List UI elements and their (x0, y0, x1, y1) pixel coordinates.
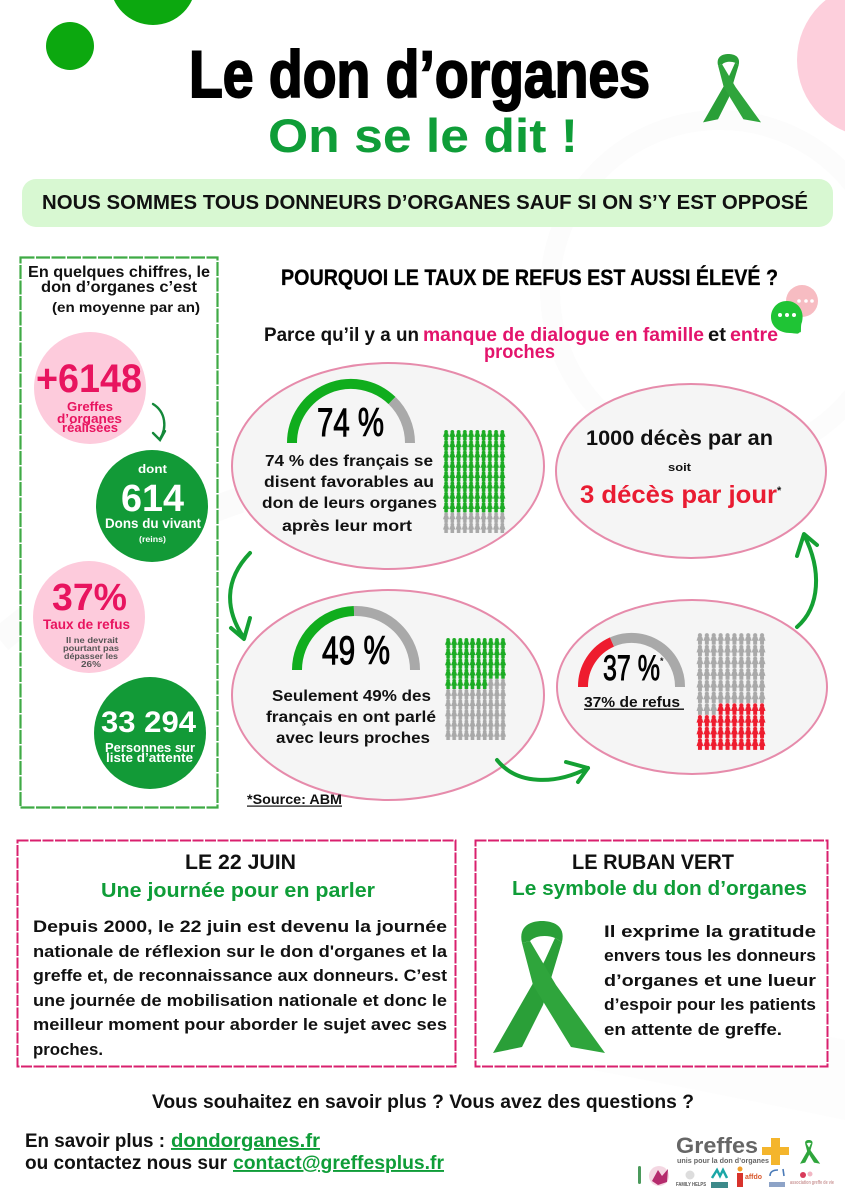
arrow: talked to refusal (497, 760, 588, 782)
logo: Greffes Plus: Greffes (676, 1133, 758, 1158)
gauge: 74% (292, 384, 410, 443)
banner: NOUS SOMMES TOUS DONNEURS D’ORGANES SAUF SI ON S’Y EST OPPOSÉ (42, 191, 808, 214)
panel: deaths per year: * (777, 485, 782, 497)
text block: une journée de mobilisation nationale et donc le (33, 992, 447, 1010)
text: reason: proches (484, 342, 555, 363)
stat: refusal rate: dépasser les (64, 651, 118, 661)
text block: nationale de réflexion sur le don d'organes et la (33, 943, 448, 961)
pictogram: 49 of 100 (445, 638, 506, 740)
text: 74% description: 74 % des français se (265, 453, 433, 470)
decorative circle: pink (797, 0, 845, 137)
panel: green ribbon (476, 840, 828, 1066)
text block: Depuis 2000, le 22 juin est devenu la journée (33, 918, 447, 936)
footer contact: ou contactez nous sur (25, 1153, 228, 1174)
panel: deaths per year: soit (668, 462, 691, 474)
stat: transplants: +6148 (36, 357, 142, 401)
logo: Greffes Plus (676, 1133, 820, 1165)
footer contact (25, 1131, 445, 1174)
stat: refusal rate: pourtant pas (63, 643, 119, 653)
stat: living donors: Dons du vivant (105, 515, 201, 531)
panel: key figures (20, 258, 218, 808)
stat: refusal rate: Taux de refus (43, 617, 130, 632)
gauge: 49% (297, 611, 415, 670)
partner logos: affdo (745, 1174, 762, 1181)
text block: proches. (33, 1041, 103, 1059)
text: refusal label: 37% de refus (584, 694, 680, 711)
stat: refusal rate: 26% (81, 659, 102, 669)
icon: logo ribbon (800, 1140, 820, 1164)
footer contact: En savoir plus : (25, 1131, 165, 1152)
text block (604, 923, 817, 1039)
text block (33, 918, 448, 1059)
pictogram: 37 of 100 (696, 633, 766, 750)
decorative circle: small green (46, 22, 94, 70)
panel heading (28, 264, 210, 315)
text block: Il exprime la gratitude (604, 923, 816, 941)
panel: 49% talked (232, 590, 544, 800)
heading: LE RUBAN VERT (572, 851, 734, 874)
stat: transplants (34, 332, 146, 444)
partner logos (638, 1166, 834, 1188)
stat: waiting list: Personnes sur (105, 741, 195, 755)
stat: waiting list: 33 294 (101, 706, 196, 739)
text: 49% description: Seulement 49% des (272, 688, 431, 705)
pictogram: 74 of 100 (443, 430, 506, 533)
subheading: Une journée pour en parler (101, 880, 375, 902)
arrow: transplants to living donors (153, 404, 165, 440)
panel: deaths per year: 3 décès par jour (580, 481, 777, 509)
gauge value: 37 % (603, 649, 660, 688)
panel heading: don d’organes c’est (41, 279, 198, 296)
panel: deaths per year (556, 384, 826, 558)
banner (22, 179, 833, 227)
icon: chat bubbles (771, 285, 818, 334)
panel heading: (en moyenne par an) (52, 299, 200, 315)
text: reason: et (708, 325, 727, 346)
footer contact: dondorganes.fr (171, 1131, 321, 1152)
stat: transplants: Greffes (67, 400, 113, 414)
stat: living donors: (reins) (139, 535, 166, 544)
panel: deaths per year: 1000 décès par an (586, 427, 773, 450)
stat: living donors (96, 450, 208, 562)
text: reason: manque de dialogue en famille (423, 325, 704, 346)
text block: meilleur moment pour aborder le sujet avec ses (33, 1016, 447, 1034)
footnote mark: * (660, 656, 664, 666)
text block: d’espoir pour les patients (604, 996, 816, 1014)
panel heading: En quelques chiffres, le (28, 264, 210, 281)
text block: en attente de greffe. (604, 1021, 782, 1039)
panel: 37% refusal (557, 600, 827, 774)
title: Le don d’organes (189, 37, 650, 111)
gauge value: 49 % (322, 629, 390, 673)
text: reason (264, 325, 778, 363)
logo: Greffes Plus: unis pour la don d’organes (677, 1156, 769, 1165)
gauge value: 74 % (317, 401, 384, 445)
stat: refusal rate: 37% (52, 577, 127, 619)
text: 49% description: avec leurs proches (276, 730, 430, 747)
heading: why refusal is high: POURQUOI LE TAUX DE REFUS EST AUSSI ÉLEVÉ ? (281, 265, 778, 290)
arrow: favorable to talked (230, 553, 250, 639)
arrow: refusal to deaths (797, 534, 817, 627)
panel: 74% favorable (232, 363, 544, 569)
subtitle: On se le dit ! (268, 109, 578, 162)
text: 74% description: disent favorables au (264, 474, 434, 491)
gauge: 37% (583, 638, 680, 687)
partner logos: FAMILY HELPS (676, 1182, 707, 1188)
text: 49% description (266, 688, 436, 747)
stat: refusal rate: Il ne devrait (66, 635, 118, 645)
footer question: Vous souhaitez en savoir plus ? Vous avez des questions ? (152, 1092, 694, 1113)
text block: greffe et, de reconnaissance aux donneurs. C’est (33, 967, 448, 985)
text: 49% description: français en ont parlé (266, 709, 436, 726)
icon: large green ribbon (493, 921, 605, 1053)
decorative circle: large green (110, 0, 196, 25)
footer contact: contact@greffesplus.fr (233, 1153, 445, 1174)
text: reason: Parce qu’il y a un (264, 325, 419, 346)
text: 74% description: après leur mort (282, 518, 413, 535)
icon: small green ribbon (703, 54, 761, 122)
text: 74% description: don de leurs organes (262, 495, 437, 512)
panel: 22 June (18, 840, 456, 1066)
text block: envers tous les donneurs (604, 947, 816, 965)
stat: transplants: d’organes (57, 412, 122, 426)
text block: d’organes et une lueur (604, 972, 817, 990)
stat: waiting list: liste d’attente (106, 751, 193, 765)
subheading: Le symbole du don d’organes (512, 878, 807, 900)
stat: living donors: dont (138, 462, 167, 476)
heading: LE 22 JUIN (185, 851, 296, 874)
text: reason: entre (730, 325, 778, 346)
source note: *Source: ABM (247, 792, 342, 807)
stat: transplants: réalisées (62, 421, 118, 435)
stat: refusal rate (33, 561, 145, 673)
text: 74% description (262, 453, 437, 535)
stat: waiting list (94, 677, 206, 789)
stat: living donors: 614 (121, 478, 184, 520)
